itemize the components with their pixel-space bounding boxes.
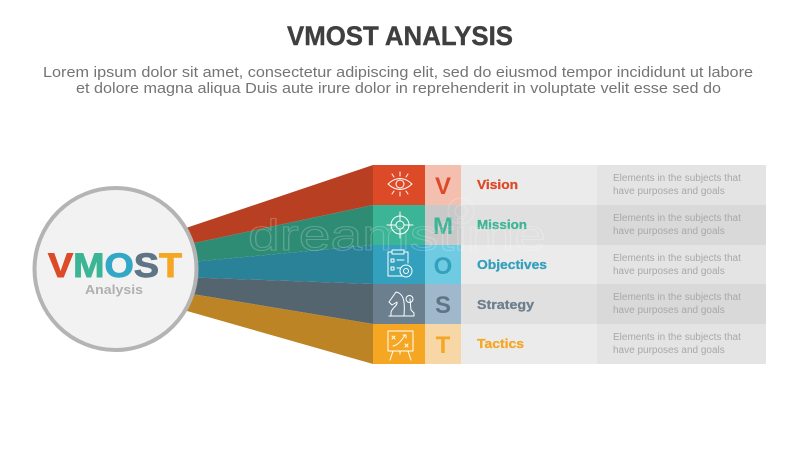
row: Mission: Mission bbox=[477, 217, 527, 232]
row: Objectives: O bbox=[434, 253, 452, 280]
subtitle text: Lorem ipsum dolor sit amet, consectetur adipiscing elit, sed do eiusmod tempor incididunt ut labore bbox=[43, 64, 753, 81]
row: Objectives: Objectives bbox=[477, 257, 547, 272]
icon: chess pieces bbox=[389, 292, 414, 316]
row: Tactics: T bbox=[436, 332, 451, 359]
row: Vision: V bbox=[435, 173, 451, 200]
row: Objectives: have purposes and goals bbox=[613, 266, 725, 277]
row: Objectives bbox=[373, 245, 766, 284]
circle: VMOST Analysis: Analysis bbox=[85, 282, 143, 297]
icon: eye bbox=[388, 172, 412, 196]
row: Vision bbox=[373, 165, 766, 205]
watermark: dreamstime bbox=[248, 211, 546, 260]
icon: target bbox=[387, 212, 413, 238]
circle: VMOST Analysis bbox=[34, 188, 196, 350]
row: Vision: have purposes and goals bbox=[613, 186, 725, 197]
row: Strategy: Elements in the subjects that bbox=[613, 292, 741, 303]
icon: tactics board bbox=[388, 331, 413, 360]
row: Vision: Elements in the subjects that bbox=[613, 173, 741, 184]
row: Mission: have purposes and goals bbox=[613, 226, 725, 237]
circle: VMOST Analysis: VMOST bbox=[48, 247, 182, 285]
subtitle text bbox=[43, 64, 753, 97]
row: Tactics: Tactics bbox=[477, 336, 524, 351]
row: Mission: Elements in the subjects that bbox=[613, 213, 741, 224]
row: Strategy: Strategy bbox=[477, 297, 535, 312]
row: Mission bbox=[373, 205, 766, 245]
subtitle text: et dolore magna aliqua Duis aute irure dolor in reprehenderit in voluptate velit esse sed do bbox=[76, 80, 721, 97]
funnel wedges bbox=[180, 165, 373, 364]
row: Vision: Vision bbox=[477, 177, 518, 192]
row: Strategy: S bbox=[435, 292, 451, 319]
row: Strategy: have purposes and goals bbox=[613, 305, 725, 316]
row: Objectives: Elements in the subjects that bbox=[613, 253, 741, 264]
row: Mission: M bbox=[433, 213, 453, 240]
row: Tactics: Elements in the subjects that bbox=[613, 332, 741, 343]
icon: clipboard with target bbox=[388, 250, 412, 277]
row: Tactics: have purposes and goals bbox=[613, 345, 725, 356]
row: Tactics bbox=[373, 324, 766, 364]
watermark bbox=[248, 198, 546, 260]
title: VMOST ANALYSIS bbox=[287, 21, 513, 51]
row: Strategy bbox=[373, 284, 766, 324]
